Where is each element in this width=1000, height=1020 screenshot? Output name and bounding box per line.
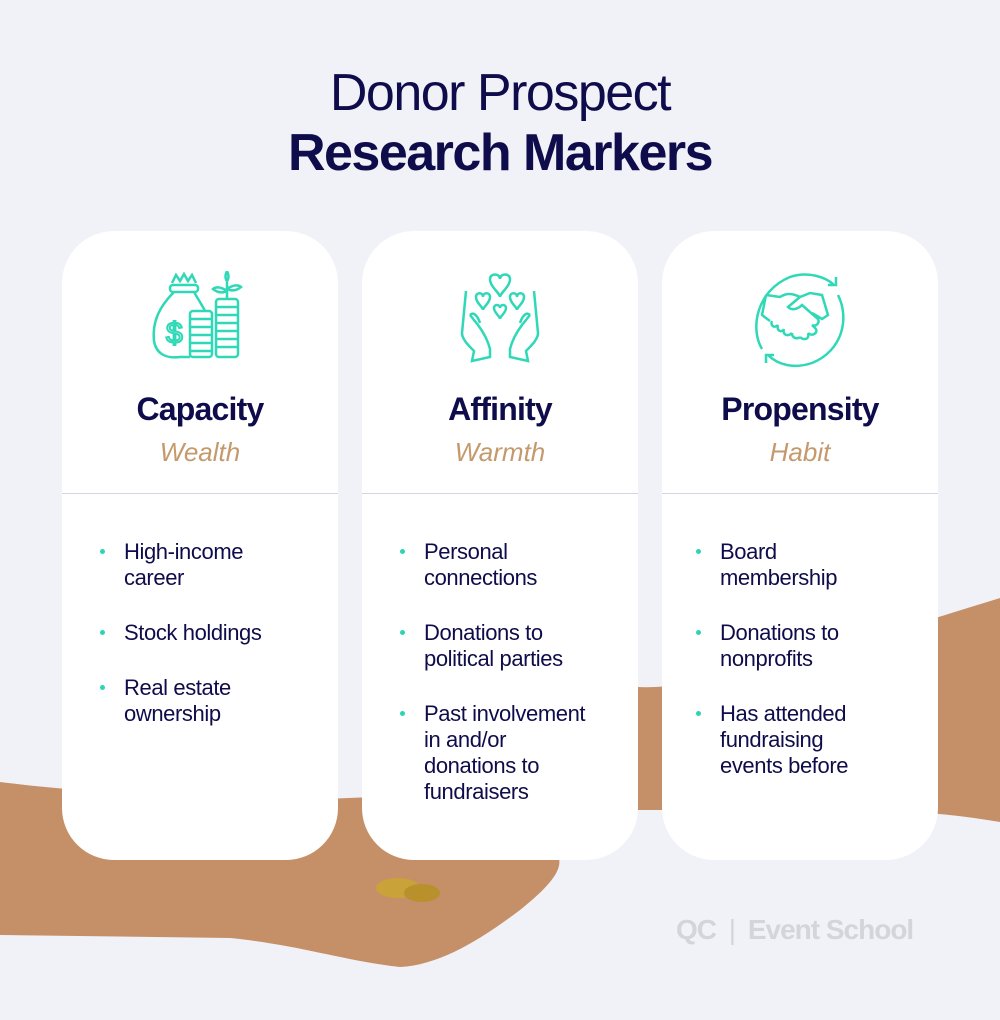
list: affinity markers: Past involvement <box>424 701 585 726</box>
title: Donor Prospect <box>330 64 670 122</box>
list: affinity markers: Donations to <box>424 620 543 645</box>
panel: propensity <box>662 231 938 860</box>
icon: money bag and coins: $ <box>166 317 183 350</box>
list: propensity markers: events before <box>720 753 848 778</box>
list: capacity markers <box>100 539 262 726</box>
subheading: Wealth <box>160 437 240 467</box>
list: capacity markers: Real estate <box>124 675 231 700</box>
list: propensity markers: nonprofits <box>720 646 813 671</box>
list: affinity markers: donations to <box>424 753 539 778</box>
list: affinity markers: in and/or <box>424 727 506 752</box>
list: propensity markers: Board <box>720 539 777 564</box>
list: capacity markers: High-income <box>124 539 243 564</box>
list: propensity markers: fundraising <box>720 727 823 752</box>
icon: hands with hearts <box>460 273 540 363</box>
heading: Capacity <box>136 391 264 427</box>
list: affinity markers: connections <box>424 565 537 590</box>
list: propensity markers: Donations to <box>720 620 839 645</box>
subheading: Habit <box>770 437 830 467</box>
title <box>288 64 712 182</box>
list: propensity markers: membership <box>720 565 837 590</box>
panel: affinity <box>362 231 638 860</box>
icon: handshake cycle <box>755 273 845 368</box>
list: affinity markers <box>400 539 586 804</box>
list: capacity markers: career <box>124 565 184 590</box>
icon: money bag and coins <box>152 271 243 359</box>
title: Research Markers <box>288 124 712 182</box>
heading: Propensity <box>721 391 879 427</box>
list: propensity markers <box>696 539 848 778</box>
list: affinity markers: political parties <box>424 646 563 671</box>
heading: Affinity <box>448 391 552 427</box>
panel: capacity <box>62 231 338 860</box>
list: affinity markers: fundraisers <box>424 779 528 804</box>
subheading: Warmth <box>455 437 545 467</box>
list: capacity markers: ownership <box>124 701 221 726</box>
list: capacity markers: Stock holdings <box>124 620 262 645</box>
list: affinity markers: Personal <box>424 539 508 564</box>
list: propensity markers: Has attended <box>720 701 846 726</box>
logo: QC | Event School <box>676 914 913 945</box>
